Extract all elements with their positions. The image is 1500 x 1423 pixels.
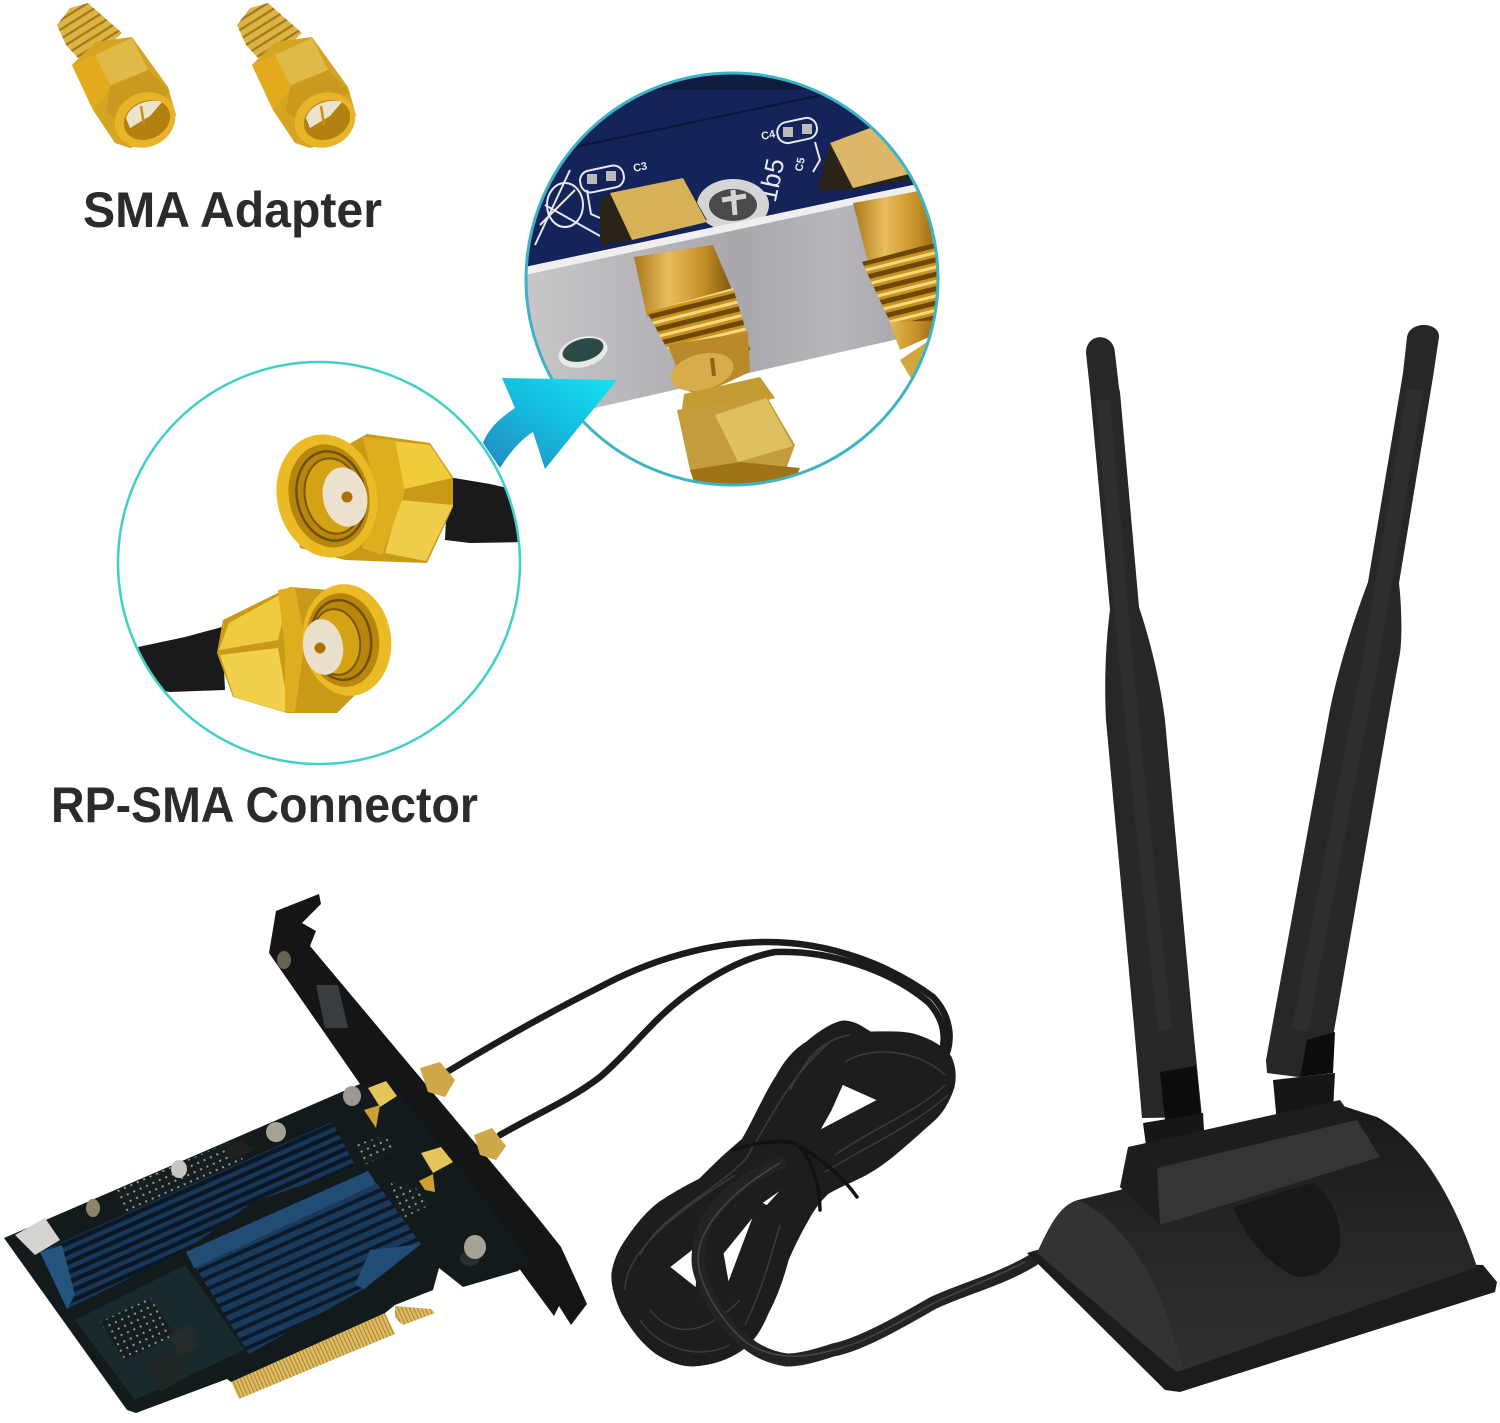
adapter front ring: [105, 82, 185, 158]
bracket: [269, 894, 587, 1325]
antenna shine: [1300, 390, 1415, 1030]
dome: [1037, 1105, 1477, 1370]
antenna right: [1266, 325, 1439, 1123]
cables: coil: [447, 942, 1033, 1365]
lower cable: [138, 627, 225, 692]
antenna foot: [1273, 1073, 1335, 1123]
icon: SMA adapter left: [57, 3, 185, 158]
circuit board: [4, 1084, 530, 1413]
coil strand highlights: [625, 1035, 948, 1352]
connector plug: [680, 377, 775, 425]
front cable loop: [698, 1163, 1033, 1360]
lower heatsink: [186, 1171, 421, 1354]
slot: [1233, 1183, 1340, 1277]
small dotted components: [115, 1140, 245, 1215]
antenna left: [1086, 337, 1205, 1156]
panel: installed connector close-up circle: C4: [760, 128, 777, 143]
card antenna cables: [447, 942, 950, 1135]
adapter hex faces: [95, 38, 148, 85]
dome end face: [1037, 1200, 1183, 1372]
right connector: [853, 192, 933, 350]
PCB: [528, 90, 914, 266]
bracket window: [316, 985, 348, 1028]
panel: installed connector close-up circle: C5: [793, 156, 808, 173]
antenna clip: [1160, 1066, 1201, 1120]
white port block: [15, 1218, 60, 1255]
upper cable: [445, 478, 518, 543]
silkscreen marks: [535, 116, 820, 245]
top nuts: [600, 178, 707, 245]
riser block: [1120, 1100, 1380, 1225]
antenna clip: [1300, 1032, 1335, 1077]
heading: SMA Adapter: SMA Adapter: [83, 182, 382, 238]
mounting hole: [558, 336, 608, 368]
panel: installed connector close-up circle: 1b5: [752, 156, 790, 204]
antenna shine: [1103, 400, 1165, 1030]
circle border: [118, 362, 520, 764]
bracket silver: [528, 184, 934, 408]
panel: installed connector close-up circle: [524, 72, 940, 486]
capacitors: [86, 1086, 486, 1266]
lower ring: [303, 584, 392, 696]
antenna foot: [1143, 1113, 1205, 1156]
rim: [1027, 1250, 1497, 1392]
outer gold nuts: [420, 1062, 506, 1160]
magnetic base: [1027, 1100, 1497, 1392]
screw: [697, 179, 769, 231]
upper connector hex: [285, 434, 453, 563]
connector left: [634, 245, 733, 317]
panel: installed connector close-up circle: C3: [632, 160, 648, 175]
circle border: [526, 73, 938, 485]
lower connector hex: [217, 587, 360, 713]
gold fingers: [231, 1306, 435, 1399]
heading: RP-SMA Connector: RP-SMA Connector: [51, 777, 478, 833]
inner gold connectors: [364, 1081, 453, 1192]
coil bundle: [613, 1022, 954, 1365]
upper heatsink: [40, 1122, 356, 1309]
arrow: [483, 378, 617, 469]
panel: RP-SMA connector circle: [118, 362, 530, 764]
component area chips: [75, 1265, 245, 1400]
zip tie: [733, 1142, 857, 1210]
PCIe card: [4, 894, 587, 1413]
icon: SMA adapter right: [237, 3, 365, 158]
upper ring: [276, 434, 378, 558]
